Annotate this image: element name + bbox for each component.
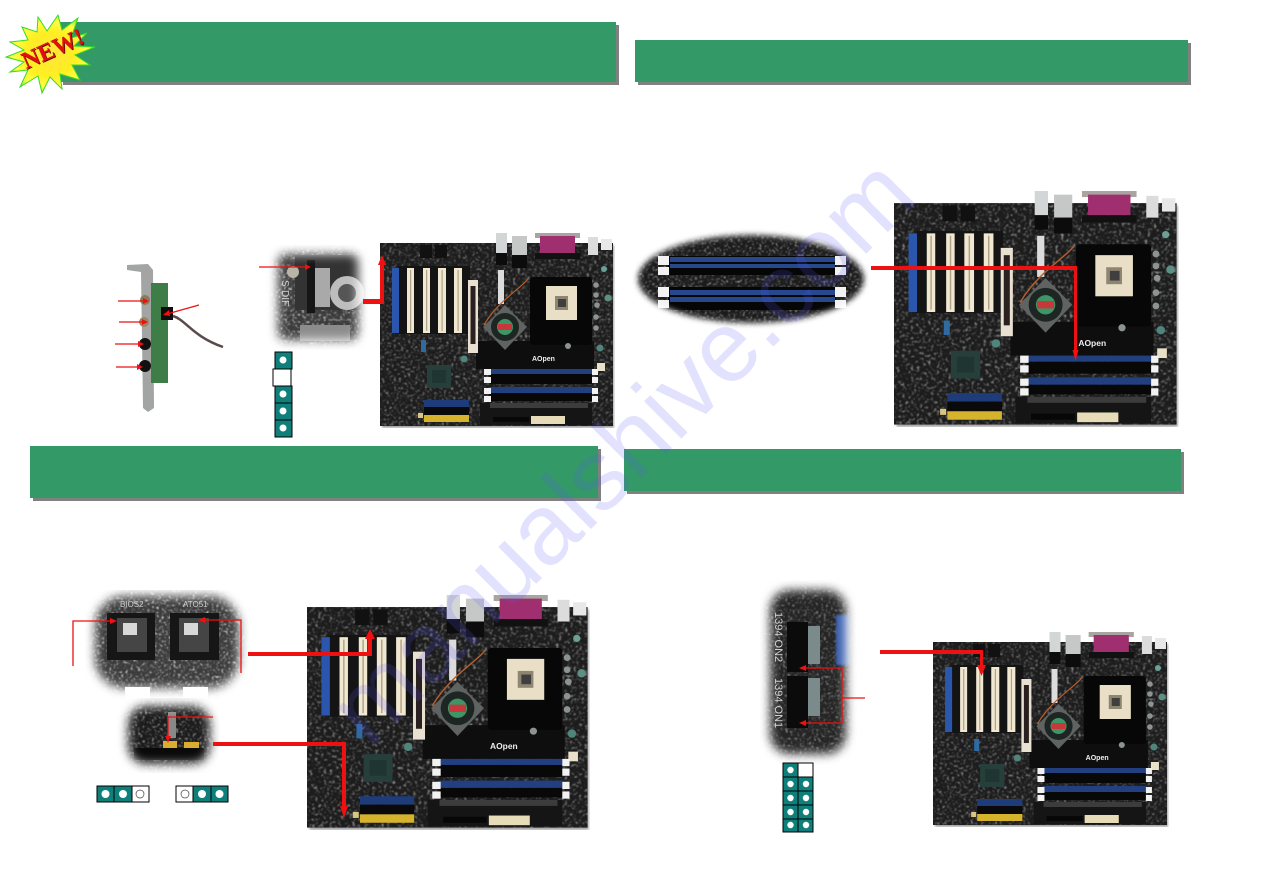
panel: jumper close-up (115, 698, 220, 773)
panel: S/PDIF connector close-up (259, 245, 370, 350)
chart: S/PDIF pin header (273, 352, 292, 437)
panel: motherboard, top-left (380, 233, 614, 428)
header bar: bottom-right feature (624, 449, 1184, 494)
panel: IEEE 1394 header close-up (760, 580, 865, 765)
arrow: jumper locator (213, 742, 348, 818)
chart: IEEE 1394 pin header (783, 763, 813, 832)
icon: NEW starburst badge: NEW! (18, 24, 88, 74)
panel: S/PDIF connector close-up: S-DIF (279, 280, 290, 306)
arrow: S/PDIF locator (363, 255, 386, 304)
arrow: IEEE 1394 locator (880, 650, 986, 676)
header bar: top-right feature (635, 40, 1191, 85)
panel: IEEE 1394 header close-up: 1394 ON2 (772, 612, 784, 662)
header bar: bottom-left feature (30, 446, 601, 501)
panel: motherboard, bottom-right (933, 632, 1168, 827)
icon: NEW starburst badge (6, 15, 95, 93)
panel: IEEE 1394 header close-up: 1394 ON1 (772, 678, 784, 728)
panel: BIOS chips close-up (73, 590, 250, 705)
panel: BIOS chips close-up: ATO51 (183, 600, 208, 609)
arrow: memory slot locator (871, 266, 1078, 361)
chart: jumper setting 2 (176, 786, 228, 802)
icon: NEW starburst badge: NEW! (19, 25, 89, 75)
chart: jumper setting 1 (97, 786, 149, 802)
panel: memory slot close-up (630, 228, 875, 330)
arrow: BIOS locator (248, 629, 375, 656)
panel: motherboard, bottom-left (307, 595, 589, 830)
watermark: manualshive.com (306, 136, 936, 766)
panel: BIOS chips close-up: BIOS2 (120, 600, 144, 609)
panel: motherboard, top-right (894, 191, 1178, 427)
panel: S/PDIF bracket photo (115, 264, 223, 412)
header bar: top-left feature (60, 22, 619, 85)
